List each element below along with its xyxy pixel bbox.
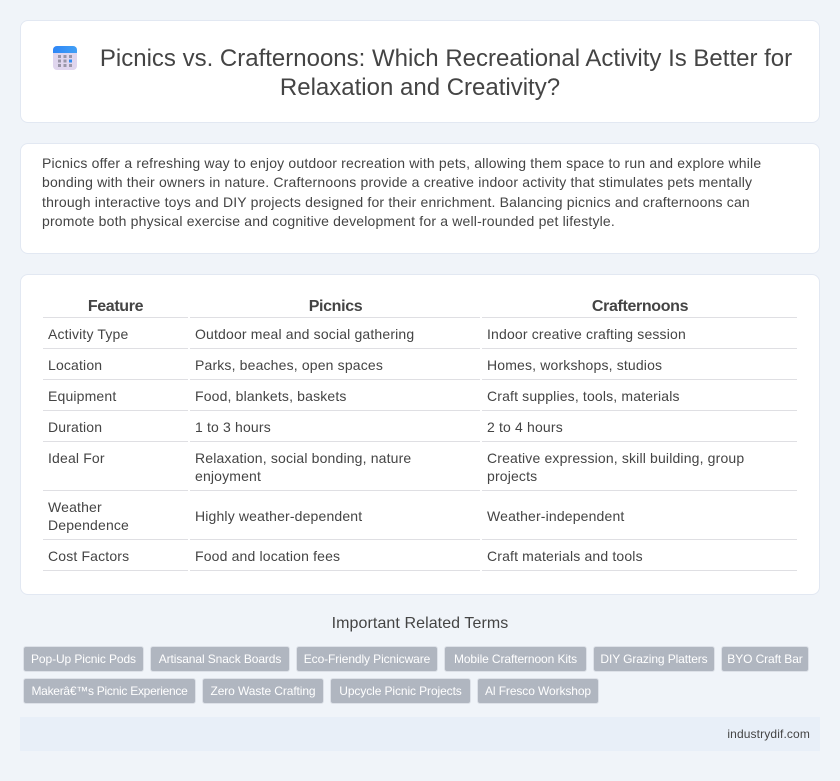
comparison table panel [20, 274, 820, 595]
table header: picnics: Picnics [309, 298, 362, 315]
footer bar [20, 717, 820, 751]
row: activity type: Outdoor meal and social gathering [195, 326, 414, 342]
row: cost factors: Food and location fees [195, 548, 340, 564]
tag [23, 678, 196, 704]
row: duration: 1 to 3 hours [195, 419, 271, 435]
row: ideal for: enjoyment [195, 468, 261, 484]
tag: Zero Waste Crafting [210, 684, 316, 698]
title: Relaxation and Creativity? [280, 74, 560, 101]
intro text: through interactive toys and DIY projects designed for their enrichment. Balancing picnics and crafternoons can [42, 194, 750, 210]
row: activity type: Indoor creative crafting session [487, 326, 686, 342]
tag: Artisanal Snack Boards [159, 652, 281, 666]
tag: Upcycle Picnic Projects [339, 684, 462, 698]
row: duration: 2 to 4 hours [487, 419, 563, 435]
title: Picnics vs. Crafternoons: Which Recreational Activity Is Better for [100, 45, 792, 72]
tag [330, 678, 471, 704]
row: weather dependence: Weather-independent [487, 508, 624, 524]
row: cost factors: Craft materials and tools [487, 548, 643, 564]
tag [444, 646, 587, 672]
tag [593, 646, 715, 672]
table header: crafternoons: Crafternoons [592, 298, 688, 315]
tag [23, 646, 144, 672]
row: duration: Duration [48, 419, 102, 435]
footer source: industrydif.com [727, 727, 810, 741]
tag [296, 646, 438, 672]
row: cost factors: Cost Factors [48, 548, 129, 564]
row: equipment: Craft supplies, tools, materials [487, 388, 680, 404]
row: activity type: Activity Type [48, 326, 128, 342]
row: ideal for: Relaxation, social bonding, nature [195, 450, 411, 466]
tag: Mobile Crafternoon Kits [454, 652, 577, 666]
title [100, 45, 792, 101]
icon: calendar [53, 46, 77, 70]
row: cost factors [48, 548, 643, 564]
row: equipment: Food, blankets, baskets [195, 388, 347, 404]
table header: feature: Feature [88, 298, 143, 315]
row: location: Location [48, 357, 102, 373]
related terms tags [23, 646, 809, 704]
tag [477, 678, 599, 704]
row: equipment: Equipment [48, 388, 116, 404]
row: activity type [48, 326, 686, 342]
row: weather dependence [48, 499, 624, 533]
row: location: Homes, workshops, studios [487, 357, 662, 373]
row: ideal for [48, 450, 744, 484]
row: location: Parks, beaches, open spaces [195, 357, 383, 373]
row: weather dependence: Dependence [48, 517, 129, 533]
intro text: Picnics offer a refreshing way to enjoy outdoor recreation with pets, allowing them space to run and explore while [42, 155, 761, 171]
row: ideal for: Creative expression, skill building, group [487, 450, 744, 466]
tag: DIY Grazing Platters [600, 652, 708, 666]
row: location [48, 357, 662, 373]
row: weather dependence: Weather [48, 499, 102, 515]
row: duration [48, 419, 563, 435]
row: ideal for: projects [487, 468, 537, 484]
tag [721, 646, 809, 672]
tag: Al Fresco Workshop [485, 684, 591, 698]
intro text: promote both physical exercise and cognitive development for a well-rounded pet lifestyle. [42, 213, 615, 229]
tag: Makerâ€™s Picnic Experience [31, 684, 188, 698]
row: equipment [48, 388, 680, 404]
header panel [20, 20, 820, 123]
tag: BYO Craft Bar [727, 652, 803, 666]
tag [202, 678, 324, 704]
related terms heading: Important Related Terms [332, 615, 508, 632]
intro text: bonding with their owners in nature. Crafternoons provide a creative indoor activity that stimulates pets mentally [42, 174, 752, 190]
tag [150, 646, 290, 672]
intro panel [20, 143, 820, 254]
row: ideal for: Ideal For [48, 450, 105, 466]
tag: Pop-Up Picnic Pods [31, 652, 136, 666]
row: weather dependence: Highly weather-dependent [195, 508, 362, 524]
intro text [42, 155, 761, 229]
tag: Eco-Friendly Picnicware [304, 652, 430, 666]
